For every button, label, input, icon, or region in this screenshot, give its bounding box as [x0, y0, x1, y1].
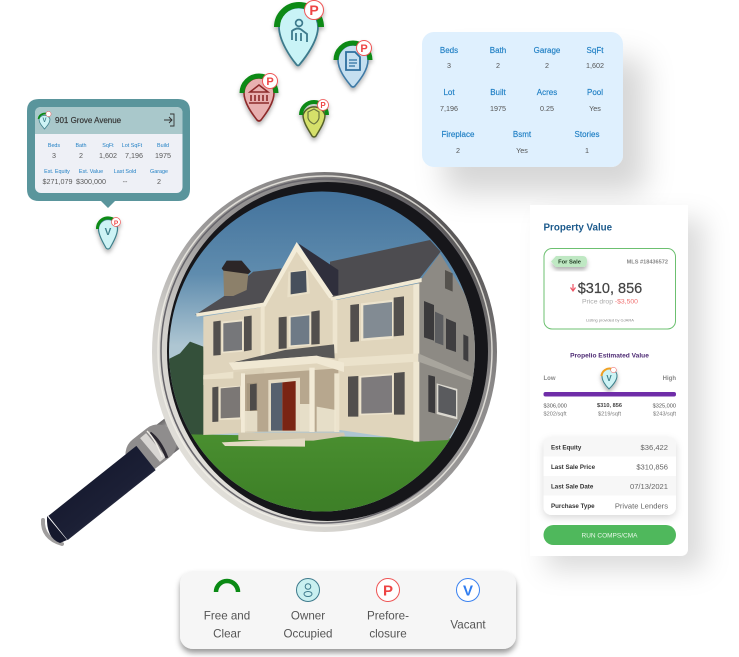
legend: preforeclosure: closure — [369, 628, 407, 640]
estimated value range: $325,000 — [653, 404, 676, 410]
estimated value range: Propelio Estimated Value — [570, 352, 649, 360]
estimated value range: $202/sqft — [544, 412, 567, 418]
panel: property features: 2 — [456, 146, 460, 155]
pin: bank — [242, 74, 278, 121]
pin: vacant — [97, 218, 120, 249]
sale details table: Est Equity — [551, 444, 582, 452]
legend: free and clear — [204, 581, 250, 640]
lower windows — [212, 387, 218, 422]
panel: property features: Fireplace — [442, 130, 475, 139]
property details — [43, 143, 171, 186]
property details: 7,196 — [125, 151, 143, 160]
property details: Est. Equity — [44, 169, 70, 175]
panel: property features: Beds — [440, 46, 458, 55]
property details: $271,079 — [43, 177, 72, 186]
legend: vacant: Vacant — [450, 618, 486, 632]
panel: property features — [422, 32, 623, 167]
sale details table: Last Sale Price — [551, 464, 596, 471]
run comps button — [544, 525, 676, 545]
house scene — [169, 192, 475, 512]
estimated value range: $243/sqft — [653, 412, 676, 418]
sale details table: Private Lenders — [615, 502, 668, 510]
panel: property features: 2 — [496, 61, 500, 70]
pin: vacant: P — [114, 220, 119, 227]
property details: 2 — [157, 177, 161, 186]
estimated value range: $219/sqft — [598, 412, 621, 418]
property details: 3 — [52, 151, 56, 160]
listing card — [544, 248, 676, 329]
panel: property features: Bsmt — [513, 130, 532, 139]
heading: Property Value — [544, 222, 613, 234]
panel: property features: 1975 — [490, 104, 506, 113]
panel: property features: Built — [490, 88, 507, 97]
magnifying glass handle — [43, 426, 182, 544]
panel: property features: Garage — [534, 46, 561, 55]
estimated value range: High — [663, 376, 676, 382]
sale details table: Purchase Type — [551, 503, 595, 510]
legend: preforeclosure: P — [383, 582, 393, 600]
icon: login arrow — [164, 114, 174, 126]
legend: owner occupied — [284, 578, 332, 640]
listing card: For Sale — [558, 260, 582, 266]
sale details table — [544, 437, 676, 515]
sale details table: 07/13/2021 — [630, 482, 668, 491]
icon: small vacant pin — [38, 111, 51, 129]
property details: SqFt — [102, 143, 114, 149]
property details: Est. Value — [79, 169, 103, 175]
estimated value range: Low — [544, 376, 556, 382]
panel: property features: SqFt — [587, 46, 604, 55]
listing card: $310, 856 — [578, 281, 642, 297]
property details: Last Sold — [114, 169, 136, 175]
sale details table: $310,856 — [636, 462, 668, 472]
panel: address card — [27, 99, 190, 208]
property details: $300,000 — [76, 177, 106, 186]
pin: document — [336, 40, 372, 87]
sale details table: $36,422 — [641, 443, 668, 452]
legend: preforeclosure: Prefore- — [367, 610, 409, 622]
pin: vacant: V — [105, 227, 112, 238]
pin: shield: P — [320, 101, 326, 110]
estimated value range: $306,000 — [544, 404, 567, 410]
side windows — [424, 301, 434, 341]
porch — [242, 368, 338, 432]
property details: Beds — [48, 143, 60, 149]
property details: 1,602 — [99, 151, 117, 160]
upper windows — [213, 321, 221, 356]
pin: bank: P — [266, 76, 274, 88]
legend: free and clear: Free and — [204, 610, 250, 622]
panel: property features: Pool — [587, 88, 603, 97]
panel: property features: Bath — [490, 46, 506, 55]
legend: vacant: V — [463, 582, 473, 600]
pin: owner occupied person: P — [309, 2, 319, 18]
legend: owner occupied: Occupied — [284, 628, 332, 640]
panel: property features: 2 — [545, 61, 549, 70]
address heading: 901 Grove Avenue — [55, 116, 122, 125]
panel: property features: 3 — [447, 61, 451, 70]
pin: shield — [301, 100, 328, 137]
property details: Garage — [150, 169, 168, 175]
panel: property features: Lot — [443, 88, 455, 97]
pin: document: P — [360, 43, 368, 55]
property details: Lot SqFt — [122, 143, 143, 149]
panel: property value — [530, 205, 688, 556]
estimated value range — [544, 352, 676, 418]
estimated value range: $310, 856 — [597, 403, 622, 409]
property details: 2 — [79, 151, 83, 160]
icon: value pin: V — [606, 374, 612, 383]
magnifying glass lens with house — [152, 172, 497, 557]
legend: preforeclosure — [367, 578, 409, 640]
property details: 1975 — [155, 151, 171, 160]
sale details table: Last Sale Date — [551, 484, 594, 490]
run comps button: RUN COMPS/CMA — [582, 532, 638, 540]
icon: small vacant pin: V — [42, 118, 47, 124]
panel: property features: Yes — [516, 146, 528, 155]
panel: property features: 1,602 — [586, 61, 604, 70]
property details: Build — [157, 143, 169, 149]
property details: -- — [123, 177, 128, 186]
property details: Bath — [75, 143, 87, 149]
listing card: Listing provided by GJARA — [586, 318, 634, 322]
listing card: Price drop -$3,500 — [582, 298, 638, 306]
legend: owner occupied: Owner — [291, 610, 325, 622]
panel: property features: 0.25 — [540, 104, 554, 113]
listing card: MLS #18436572 — [627, 260, 668, 266]
panel: property features: Acres — [537, 88, 557, 97]
panel: property features: Stories — [575, 130, 599, 139]
panel: property features: 1 — [585, 146, 589, 155]
legend: vacant — [450, 578, 486, 632]
legend: free and clear: Clear — [213, 628, 241, 640]
legend — [180, 571, 516, 649]
lens rim — [152, 172, 497, 532]
panel: property features: Yes — [589, 104, 601, 113]
pin: owner occupied person — [277, 0, 324, 66]
panel: property features: 7,196 — [440, 104, 458, 113]
